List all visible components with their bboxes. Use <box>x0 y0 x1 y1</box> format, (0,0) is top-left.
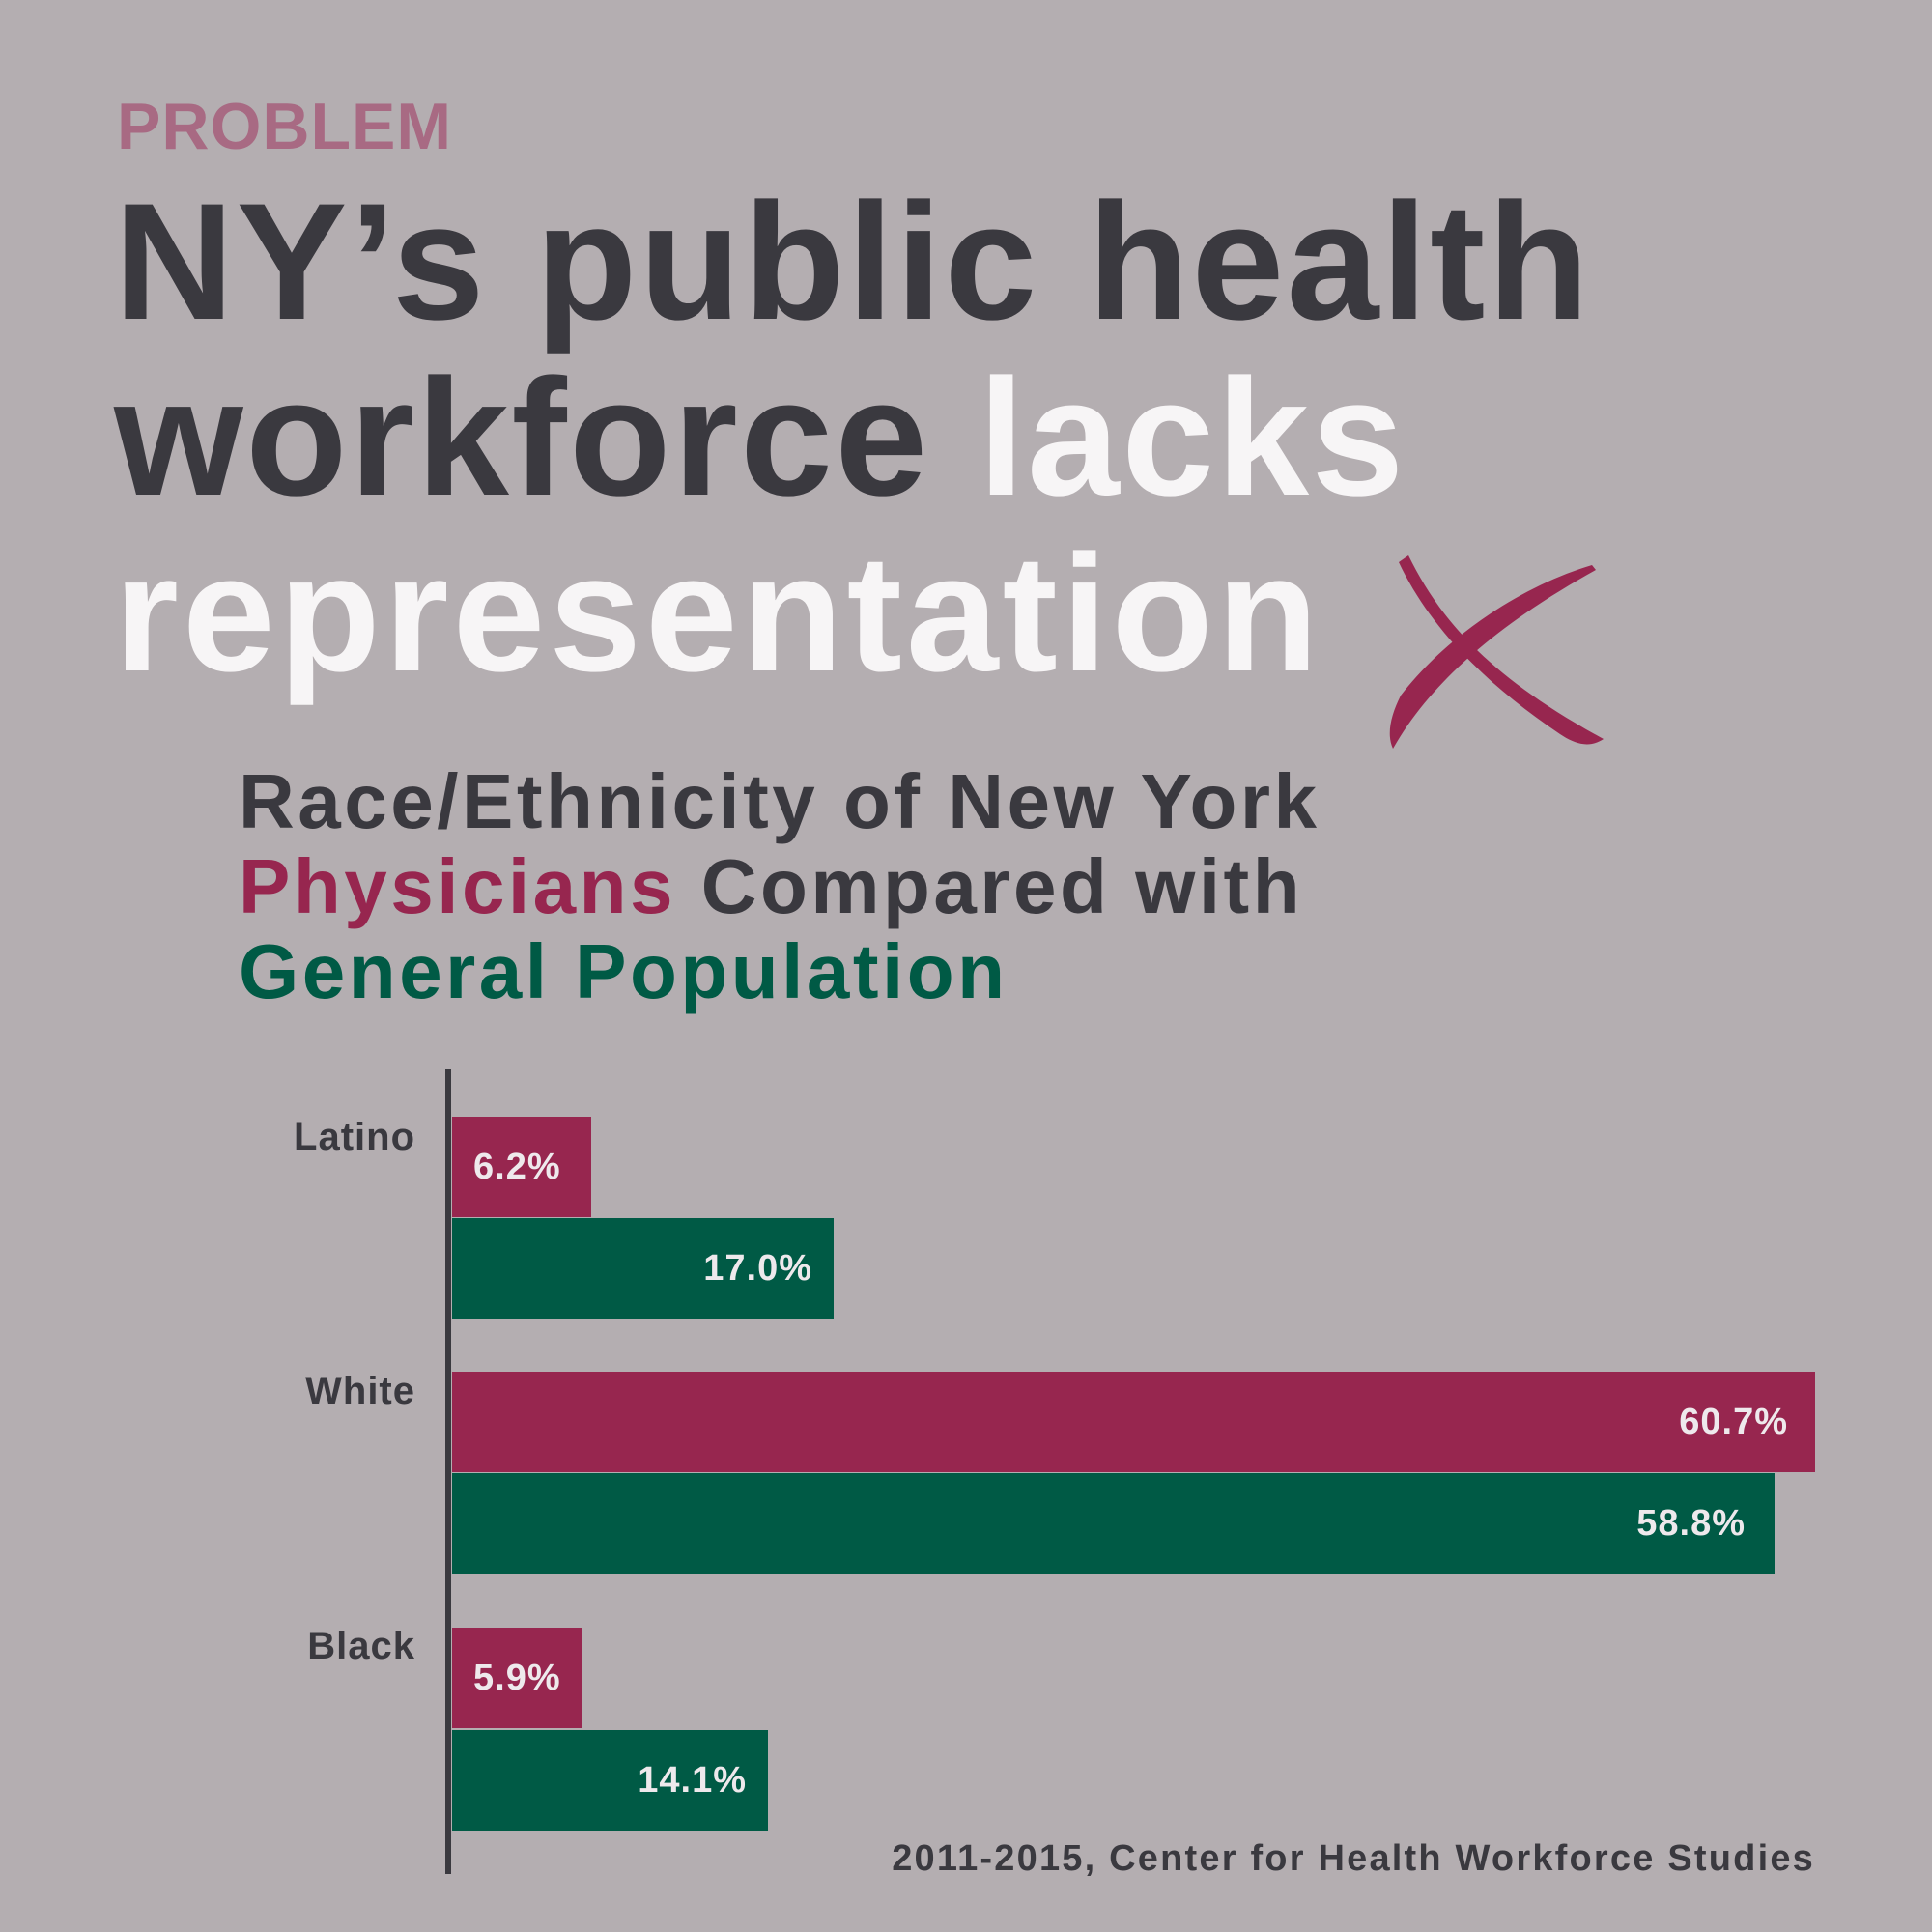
icon: red X mark <box>1389 555 1604 749</box>
title <box>114 169 1592 706</box>
bar: White physicians 60.7% <box>452 1372 1815 1472</box>
bar: Latino population 17.0%: 17.0% <box>703 1248 812 1289</box>
bar: Black population 14.1% <box>452 1730 768 1831</box>
subtitle <box>239 758 1320 1014</box>
bar: Latino physicians 6.2% <box>452 1117 591 1217</box>
title: workforce lacks <box>114 345 1406 530</box>
subtitle: Race/Ethnicity of New York <box>239 758 1320 844</box>
title: NY’s public health <box>114 169 1592 355</box>
bar: Black population 14.1%: 14.1% <box>638 1760 747 1801</box>
title: representation <box>114 521 1322 706</box>
bar: Black physicians 5.9% <box>452 1628 582 1728</box>
category label: Black: Black <box>307 1625 415 1667</box>
bar: White population 58.8%: 58.8% <box>1636 1503 1746 1544</box>
category label: Latino: Latino <box>294 1116 415 1158</box>
bar: Latino population 17.0% <box>452 1218 834 1319</box>
label: PROBLEM: PROBLEM <box>117 90 452 163</box>
bar chart <box>294 1069 1815 1874</box>
subtitle: General Population <box>239 928 1008 1014</box>
bar: Latino physicians 6.2%: 6.2% <box>473 1147 561 1187</box>
subtitle: Physicians Compared with <box>239 843 1303 929</box>
category label: White: White <box>305 1370 415 1412</box>
bar: White physicians 60.7%: 60.7% <box>1679 1402 1788 1442</box>
bar: White population 58.8% <box>452 1473 1775 1574</box>
bar: Black physicians 5.9%: 5.9% <box>473 1658 561 1698</box>
source note: 2011-2015, Center for Health Workforce Studies <box>892 1838 1815 1879</box>
axis line <box>445 1069 451 1874</box>
